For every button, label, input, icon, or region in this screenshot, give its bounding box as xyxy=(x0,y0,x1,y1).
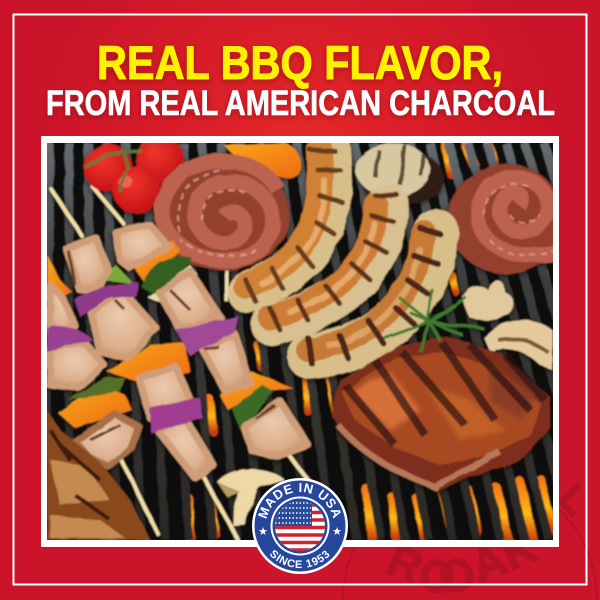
badge text top: MADE IN USA xyxy=(258,483,341,519)
bratwurst 2 xyxy=(270,194,396,330)
grill char marks xyxy=(68,250,275,440)
skewer sticks xyxy=(52,187,308,540)
badge stars: ★ xyxy=(258,526,268,538)
onion pieces xyxy=(75,282,138,317)
meat chunks xyxy=(50,225,308,478)
badge: made in USA since 1953: ★ xyxy=(332,526,342,538)
rib bottom left xyxy=(47,410,150,540)
pepper pieces xyxy=(47,255,72,300)
grilled steak xyxy=(333,336,551,492)
badge disc xyxy=(252,478,348,574)
white photo card xyxy=(41,136,559,547)
eggplant slice xyxy=(356,143,444,205)
badge text bottom: SINCE 1953 xyxy=(270,550,330,568)
watermark stamp: L xyxy=(550,475,598,524)
coil sausage right xyxy=(448,164,564,274)
coil sausage left xyxy=(154,160,290,270)
orange pepper top xyxy=(224,143,301,178)
grill bars xyxy=(45,143,600,540)
title xyxy=(46,36,555,123)
flames xyxy=(186,143,553,540)
bratwurst 3 xyxy=(308,228,440,364)
rosemary sprig xyxy=(385,290,482,350)
zucchini pieces xyxy=(106,264,133,286)
mushroom bottom xyxy=(217,469,285,525)
skewer meat and vegetables xyxy=(47,225,308,478)
badge: made in USA since 1953 xyxy=(252,478,348,574)
food items xyxy=(47,136,564,540)
grill base xyxy=(40,135,560,545)
tomatoes xyxy=(84,136,184,214)
bratwurst 1 xyxy=(246,150,342,302)
mushrooms right xyxy=(462,280,552,370)
watermark stamp xyxy=(343,473,598,600)
headline yellow: REAL BBQ FLAVOR, xyxy=(97,36,503,89)
icon: american flag xyxy=(275,501,325,551)
photo: grilled food xyxy=(47,143,553,540)
